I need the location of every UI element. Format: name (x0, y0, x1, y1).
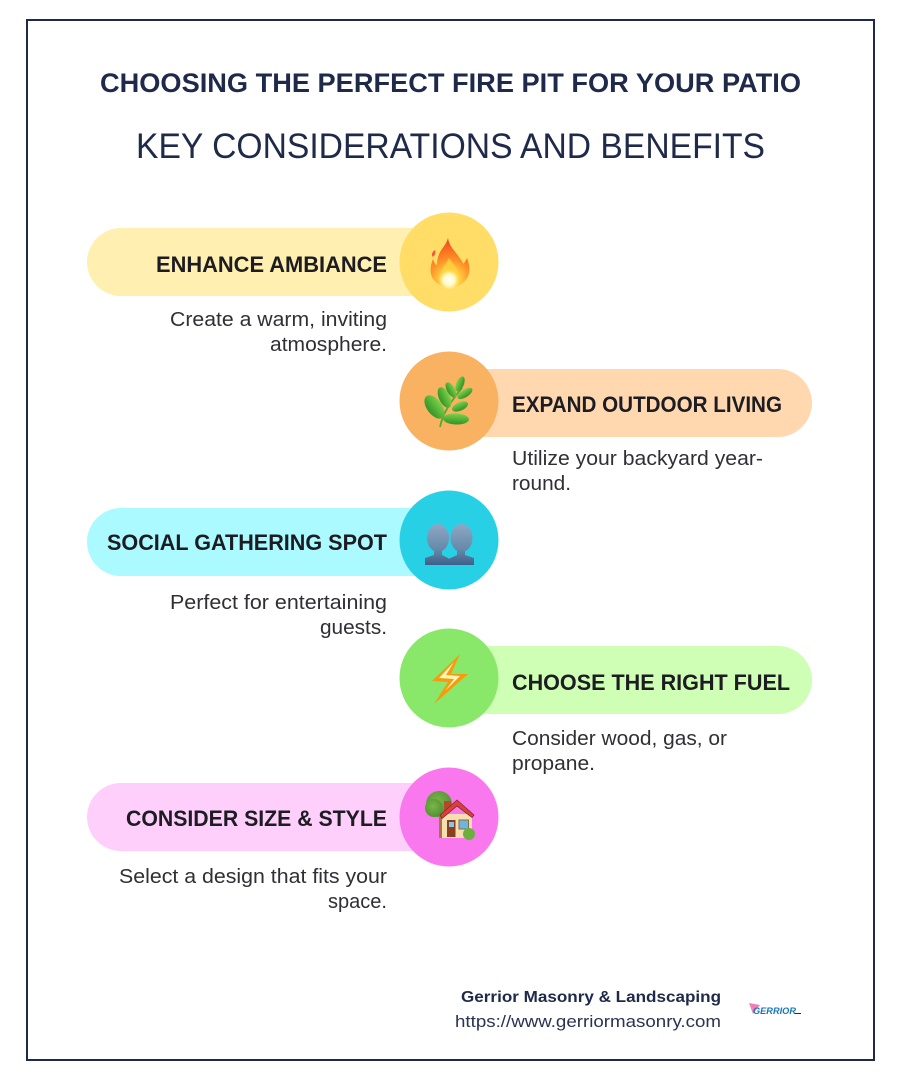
description: choose the right fuel: Consider wood, gas, or (512, 728, 727, 750)
description: expand outdoor living: round. (512, 473, 571, 495)
icon circle: pink (400, 768, 498, 866)
subtitle: KEY CONSIDERATIONS AND BENEFITS (136, 127, 765, 166)
pill: consider size and style (87, 783, 440, 851)
heading: enhance ambiance: ENHANCE AMBIANCE (156, 252, 387, 277)
pill: choose the right fuel (460, 646, 812, 714)
icon: lightning bolt (432, 654, 468, 704)
description: social gathering spot (170, 592, 387, 639)
description: social gathering spot: Perfect for entertaining (170, 592, 387, 614)
icon circle: green (400, 628, 498, 728)
icon: house with tree (425, 791, 475, 840)
description: choose the right fuel (512, 728, 727, 775)
icon: herb (420, 375, 474, 427)
title: CHOOSING THE PERFECT FIRE PIT FOR YOUR PATIO (100, 68, 801, 98)
pill: social gathering spot (87, 508, 440, 576)
footer: website url: https://www.gerriormasonry.com (455, 1013, 721, 1031)
logo: GERRIOR (753, 1006, 796, 1016)
description: consider size and style: Select a design that fits your (119, 866, 387, 888)
pill: expand outdoor living (460, 369, 812, 437)
description: choose the right fuel: propane. (512, 753, 595, 775)
description: consider size and style: space. (328, 891, 387, 913)
description: expand outdoor living: Utilize your backyard year- (512, 448, 763, 470)
item: social gathering spot (87, 490, 498, 639)
description: enhance ambiance (170, 309, 387, 356)
icon: silhouettes (425, 524, 474, 565)
item: consider size and style (87, 768, 498, 913)
description: enhance ambiance: Create a warm, inviting (170, 309, 387, 331)
description: enhance ambiance: atmosphere. (270, 334, 387, 356)
pill: enhance ambiance (87, 228, 440, 296)
icon: fire (431, 238, 469, 289)
item: enhance ambiance (87, 212, 499, 356)
heading: social gathering spot: SOCIAL GATHERING SPOT (107, 530, 388, 555)
description: expand outdoor living (512, 448, 763, 495)
description: social gathering spot: guests. (320, 617, 387, 639)
item: expand outdoor living (400, 352, 812, 495)
logo (749, 1003, 801, 1016)
heading: expand outdoor living: EXPAND OUTDOOR LIVING (512, 392, 782, 417)
icon circle: cyan (400, 490, 498, 590)
heading: choose the right fuel: CHOOSE THE RIGHT FUEL (512, 670, 790, 695)
description: consider size and style (119, 866, 387, 913)
icon circle: orange (400, 352, 498, 450)
item: choose the right fuel (400, 628, 812, 775)
footer: company name: Gerrior Masonry & Landscaping (461, 989, 721, 1006)
icon circle: yellow (400, 212, 498, 312)
heading: consider size and style: CONSIDER SIZE & STYLE (126, 806, 387, 831)
